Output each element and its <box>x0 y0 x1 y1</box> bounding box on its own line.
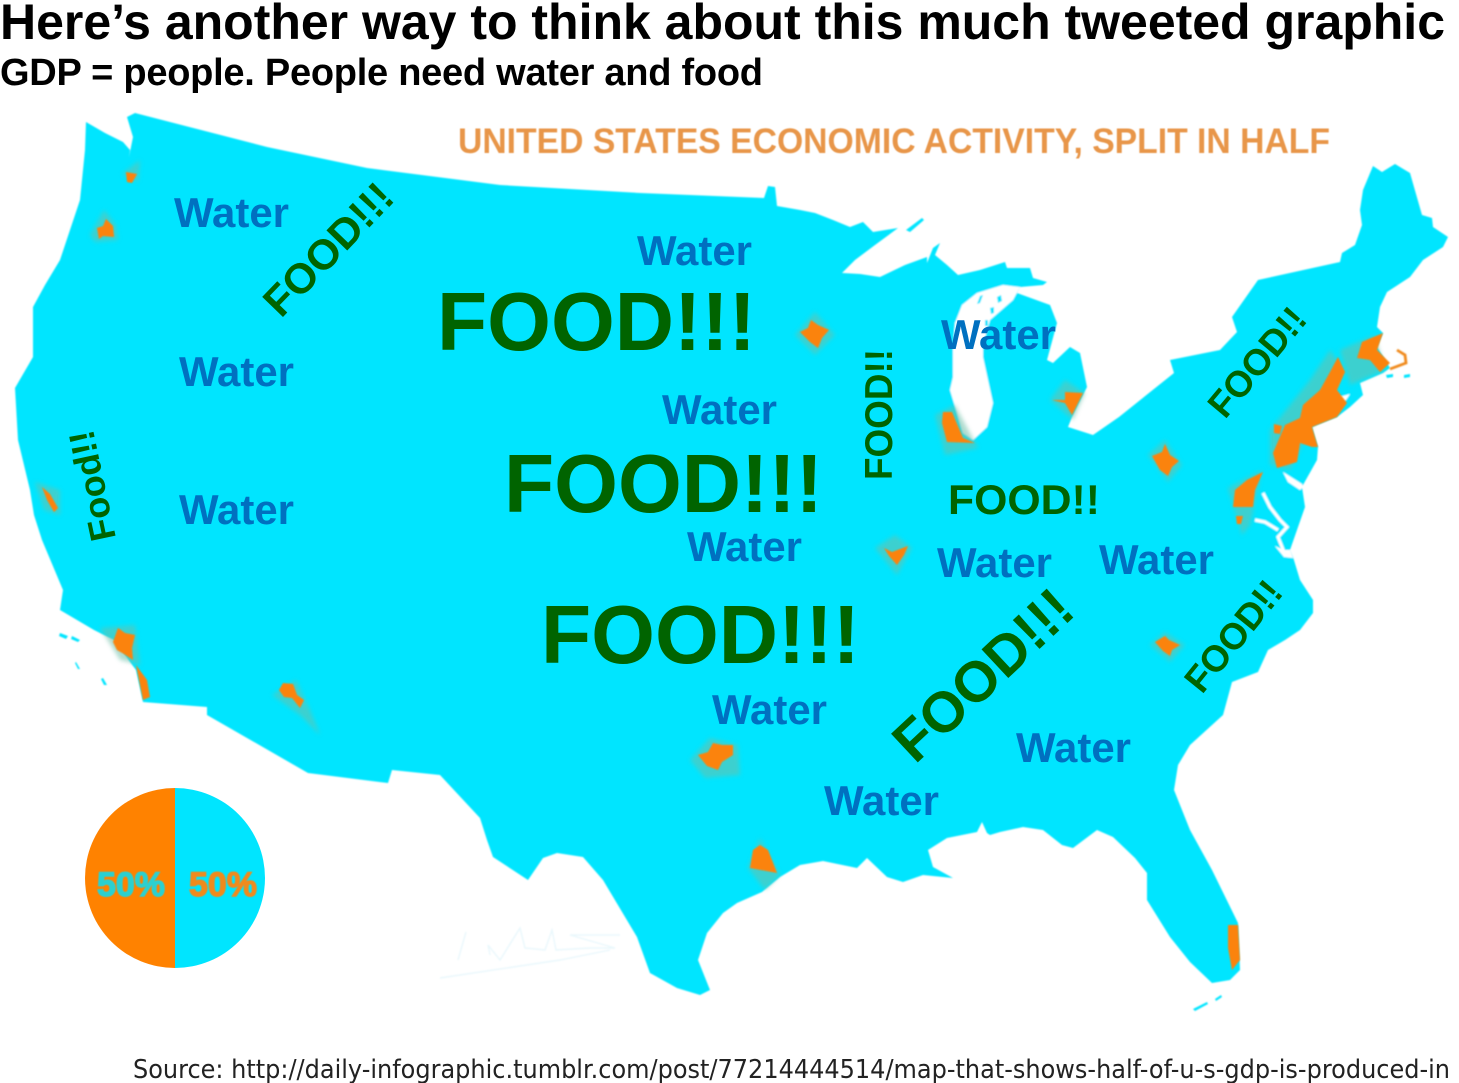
water label: Water <box>637 227 752 274</box>
cluster: Cape Cod <box>1390 350 1406 369</box>
cluster: Baltimore and Washington <box>1233 424 1282 524</box>
pie chart: 50% / 50% split <box>85 788 265 968</box>
rotated food label: Northwest: FOOD!!! <box>254 173 403 325</box>
cluster: Miami <box>1228 925 1240 970</box>
faint halos around city clusters <box>35 160 1385 890</box>
water label: Water <box>179 348 294 395</box>
map heading: UNITED STATES ECONOMIC ACTIVITY, SPLIT IN HALF <box>458 122 1330 161</box>
water label: Water <box>174 189 289 236</box>
pie slice: orange half <box>85 788 175 968</box>
water label: Water <box>941 311 1056 358</box>
food label: FOOD!! <box>948 476 1100 523</box>
cluster: St Louis <box>884 546 908 565</box>
chesapeake bay and delaware bay <box>1283 472 1303 490</box>
cluster: Houston <box>750 845 777 873</box>
offshore islands <box>59 218 1410 1011</box>
rotated food label: Southeast: FOOD!! <box>1176 572 1291 700</box>
water label: Water <box>687 523 802 570</box>
lake michigan <box>950 285 1020 440</box>
water label: Water <box>179 486 294 533</box>
cluster: Los Angeles <box>113 628 135 660</box>
long island sound <box>1320 394 1350 411</box>
subtitle: GDP = people. People need water and food <box>0 52 763 94</box>
cluster: Atlanta <box>1155 636 1180 656</box>
vertical food label: Midwest: FOOD!! <box>858 349 901 480</box>
cluster: Phoenix <box>279 683 304 708</box>
cluster: Detroit <box>1052 392 1083 415</box>
water label: Water <box>662 386 777 433</box>
water label: Water <box>824 777 939 824</box>
map signature <box>440 928 620 978</box>
large food label: FOOD!!! <box>437 275 756 368</box>
cluster: Minneapolis <box>800 320 829 348</box>
cluster: New York corridor <box>1273 357 1347 468</box>
water label: Water <box>1099 536 1214 583</box>
rotated food label: Northeast: FOOD!! <box>1200 299 1315 425</box>
water label: Water <box>712 686 827 733</box>
cluster: Columbus <box>1152 444 1179 476</box>
cluster: Boston <box>1357 333 1390 372</box>
rotated food label: California: Food!! <box>60 427 124 545</box>
cluster: San Diego <box>136 665 150 700</box>
cluster: Chicago <box>942 412 975 443</box>
water label: Water <box>937 539 1052 586</box>
economic activity city clusters <box>42 172 1406 970</box>
water labels <box>174 189 1214 824</box>
pie label: left 50%: 50% <box>97 866 165 904</box>
cluster: Bay Area <box>42 487 58 512</box>
cluster: Dallas <box>698 743 733 770</box>
rotated food label: South: FOOD!!! <box>880 576 1086 775</box>
pie label: right 50%: 50% <box>189 866 257 904</box>
lake michigan islands <box>977 295 1002 326</box>
large food label: FOOD!!! <box>541 588 860 681</box>
pie slice: cyan half <box>175 788 265 968</box>
cluster: Portland <box>97 219 114 239</box>
food labels <box>60 173 1315 775</box>
large food label: FOOD!!! <box>504 437 823 530</box>
water label: Water <box>1016 724 1131 771</box>
cluster: Seattle <box>126 172 137 183</box>
